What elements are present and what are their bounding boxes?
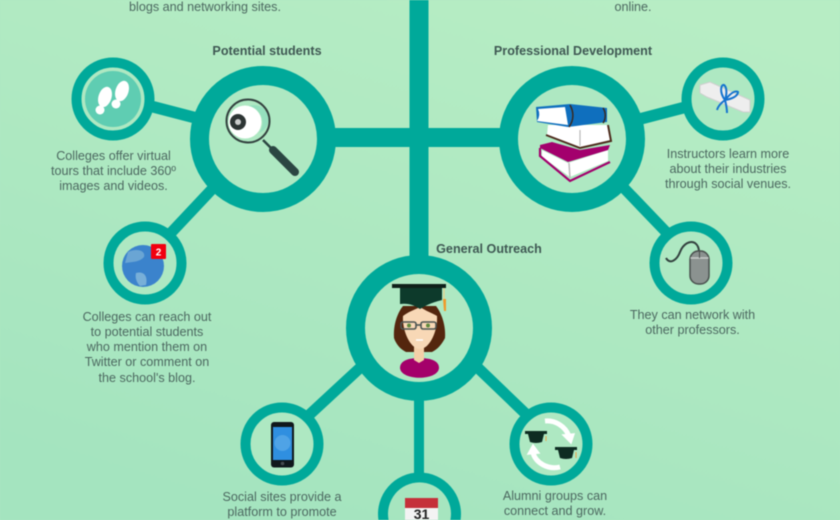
text: virtual tours bbox=[51, 149, 176, 193]
node: calendar bbox=[378, 472, 461, 520]
node: mouse bbox=[654, 226, 728, 300]
icon: graduate avatar bbox=[392, 284, 446, 378]
icon: globe with badge: 2 bbox=[156, 248, 162, 258]
text: social sites: platform to promote bbox=[227, 505, 337, 519]
hub: potential students magnifier bbox=[200, 76, 326, 202]
heading: potential students: Potential students bbox=[212, 44, 322, 58]
text: instructors: through social venues. bbox=[665, 177, 791, 191]
node: footprints bbox=[76, 62, 150, 136]
icon: smartphone bbox=[271, 422, 294, 468]
icon: computer mouse bbox=[666, 242, 709, 284]
top text fragment left: blogs and networking sites. bbox=[129, 0, 281, 14]
text: network: other professors. bbox=[645, 323, 740, 337]
top text fragment right: online. bbox=[614, 0, 652, 14]
icon: footprints bbox=[96, 79, 131, 114]
text: reach out: Twitter or comment on bbox=[85, 355, 209, 369]
text: alumni: connect and grow. bbox=[504, 504, 606, 518]
text: instructors: about their industries bbox=[670, 162, 786, 176]
text: alumni bbox=[503, 489, 607, 518]
text: network: They can network with bbox=[630, 308, 755, 322]
heading: professional development: Professional Development bbox=[494, 44, 653, 58]
text: virtual tours: images and videos. bbox=[59, 179, 168, 193]
hub: professional development books bbox=[508, 76, 636, 202]
text: virtual tours: tours that include 360º bbox=[51, 164, 176, 178]
text: reach out bbox=[83, 310, 212, 385]
text: social sites bbox=[222, 490, 342, 519]
text: social sites: Social sites provide a bbox=[222, 490, 342, 504]
icon: diploma scroll bbox=[700, 82, 750, 113]
node: globe bbox=[108, 226, 182, 300]
node: phone bbox=[246, 408, 318, 480]
text: reach out: who mention them on bbox=[86, 340, 207, 354]
text: reach out: the school's blog. bbox=[99, 371, 195, 385]
text: reach out: Colleges can reach out bbox=[83, 310, 212, 324]
text: network bbox=[630, 308, 755, 337]
icon: magnifying glass bbox=[226, 100, 295, 172]
network connectors bbox=[150, 0, 690, 476]
heading: general outreach: General Outreach bbox=[436, 242, 542, 256]
text: reach out: to potential students bbox=[91, 325, 203, 339]
hub: general outreach graduate bbox=[356, 264, 482, 392]
text: instructors: Instructors learn more bbox=[667, 147, 789, 161]
text: alumni: Alumni groups can bbox=[503, 489, 607, 503]
text: virtual tours: Colleges offer virtual bbox=[56, 149, 171, 163]
node: diploma bbox=[686, 62, 760, 136]
text: instructors bbox=[665, 147, 791, 191]
icon: alumni cycle bbox=[525, 421, 577, 468]
node: alumni bbox=[514, 408, 588, 480]
icon: stack of books bbox=[536, 104, 611, 181]
